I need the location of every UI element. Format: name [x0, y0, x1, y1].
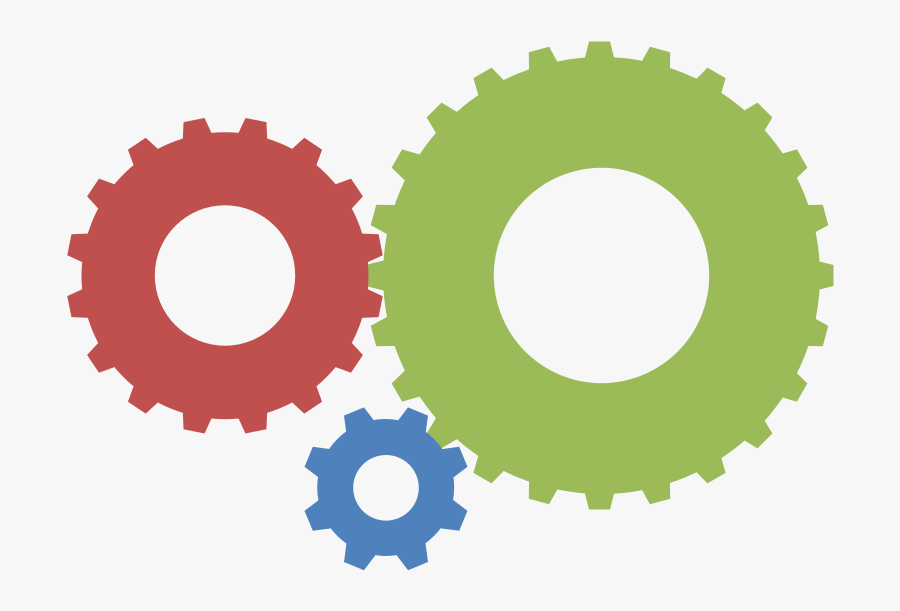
icon: medium red gear [66, 117, 384, 434]
green gear hole [494, 168, 709, 383]
blue gear hole [353, 455, 419, 521]
icon: large green gear [366, 42, 834, 510]
icon: small blue gear [303, 405, 469, 572]
red gear hole [155, 205, 295, 346]
